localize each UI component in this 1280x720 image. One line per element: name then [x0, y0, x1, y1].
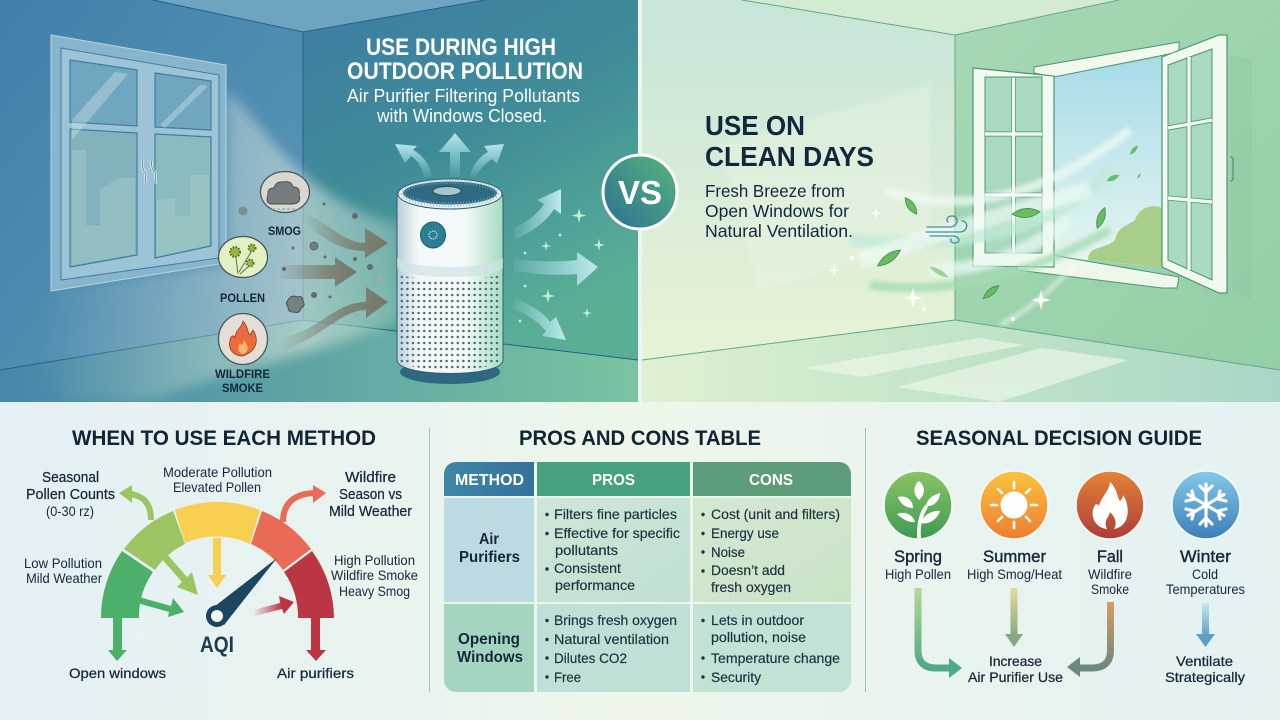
label: high pollution: Wildfire Smoke — [331, 567, 418, 583]
table header — [444, 462, 851, 496]
subheading: clean days: Fresh Breeze from — [705, 181, 845, 201]
icon: wildfire — [218, 314, 268, 364]
season labels: Winter — [1180, 547, 1231, 566]
heading: seasonal guide: SEASONAL DECISION GUIDE — [916, 427, 1202, 450]
gauge needle — [206, 558, 277, 627]
arrow: low pollution to gauge — [137, 597, 184, 617]
wall light beam — [720, 85, 930, 290]
icon: spring — [884, 471, 952, 539]
sparkles — [519, 208, 605, 322]
season labels: Cold — [1192, 566, 1218, 582]
arrow: wildfire season — [283, 485, 326, 522]
section: pros and cons — [444, 427, 851, 692]
table — [444, 462, 851, 692]
subheading: high pollution: with Windows Closed. — [376, 106, 547, 126]
label: wildfire smoke: SMOKE — [222, 381, 263, 395]
floor light patches — [803, 338, 1128, 402]
season labels: Temperatures — [1166, 581, 1245, 597]
row: air purifiers: Purifiers — [459, 549, 520, 566]
label: wildfire smoke: WILDFIRE — [215, 367, 270, 381]
arrows: clean air out — [514, 189, 598, 340]
arrow: winter — [1196, 603, 1215, 647]
season labels: Spring — [894, 547, 942, 566]
arrow: pollen to purifier — [280, 257, 357, 287]
gauge: AQI — [101, 502, 334, 618]
section: when to use each method — [24, 427, 418, 681]
badge: VS: VS — [618, 174, 662, 211]
heading: pros and cons: PROS AND CONS TABLE — [519, 427, 761, 450]
row: opening windows: pollution, noise — [711, 629, 806, 645]
purifier control button — [420, 222, 446, 248]
row: opening windows: Opening — [458, 631, 520, 648]
subheading: clean days — [705, 181, 853, 241]
outcome: ventilate strategically: Ventilate — [1176, 653, 1233, 669]
heading: high pollution — [347, 34, 583, 85]
arrow: fall — [1067, 602, 1110, 677]
outcome: ventilate strategically: Strategically — [1165, 669, 1245, 685]
heading: clean days: CLEAN DAYS — [705, 141, 874, 172]
row: air purifiers: Cost (unit and filters) — [711, 506, 840, 522]
panel: clean days room — [642, 0, 1280, 402]
label: low pollution — [24, 555, 102, 586]
row: air purifiers: Effective for specific — [554, 525, 680, 541]
label: high pollution: High Pollution — [334, 552, 415, 568]
icon: wind — [926, 216, 967, 243]
label: pollen: POLLEN — [220, 291, 265, 305]
outcome: ventilate strategically — [1165, 653, 1245, 685]
row: air purifiers: pollutants — [555, 542, 618, 558]
label: moderate: Moderate Pollution — [163, 464, 272, 480]
season labels — [885, 547, 1245, 597]
arrow: moderate to gauge — [208, 538, 226, 588]
icon: summer — [980, 471, 1048, 539]
row: air purifiers: Air — [479, 531, 499, 548]
row: air purifiers: fresh oxygen — [711, 579, 791, 595]
pollutant particles — [238, 202, 383, 312]
label: open windows: Open windows — [69, 665, 166, 681]
heading: clean days — [705, 110, 874, 172]
panel divider — [638, 0, 642, 402]
row: opening windows: Free — [554, 669, 581, 685]
label: moderate: Elevated Pollen — [173, 479, 261, 495]
arrows: clean air up — [395, 133, 504, 177]
row: air purifiers: Doesn’t add — [711, 562, 785, 578]
label: wildfire season — [329, 469, 412, 520]
row: air purifiers: Noise — [711, 544, 745, 560]
label: high pollution — [331, 552, 418, 599]
label: seasonal pollen — [26, 469, 115, 519]
arrow: gauge to high — [253, 596, 294, 616]
outcome: increase purifier use — [968, 653, 1063, 685]
season labels: Wildfire — [1088, 566, 1132, 582]
icon: winter — [1172, 471, 1240, 539]
icon: leaves — [875, 144, 1141, 301]
row: air purifiers: Filters fine particles — [554, 506, 677, 522]
season labels: Smoke — [1091, 581, 1129, 597]
row: air purifiers: performance — [555, 577, 635, 593]
arrow: seasonal pollen to gauge — [161, 553, 198, 595]
table header: CONS — [749, 472, 793, 489]
heading: high pollution: USE DURING HIGH — [366, 34, 556, 61]
right sash — [1162, 35, 1233, 293]
label: low pollution: Mild Weather — [26, 570, 102, 586]
label: smog: SMOG — [268, 224, 301, 238]
icon: smog — [260, 172, 310, 212]
table header: METHOD — [455, 472, 524, 489]
label: wildfire season: Mild Weather — [329, 503, 412, 520]
icon: closed window — [51, 35, 226, 291]
label: wildfire season: Season vs — [339, 486, 402, 503]
subheading: high pollution: Air Purifier Filtering Pollutants — [347, 86, 580, 106]
arrow: spring — [918, 588, 962, 678]
arrow: seasonal pollen — [119, 485, 151, 520]
arrow: air purifiers — [306, 618, 326, 661]
haze beam — [40, 90, 400, 400]
row: opening windows: Lets in outdoor — [711, 612, 804, 628]
label: air purifiers: Air purifiers — [277, 665, 354, 681]
row: opening windows: Dilutes CO2 — [554, 650, 627, 666]
section: seasonal guide — [884, 427, 1245, 685]
label: AQI: AQI — [200, 632, 234, 657]
arrow: smog to purifier — [306, 213, 388, 258]
left sash — [973, 68, 1054, 267]
row: air purifiers — [444, 498, 851, 602]
arrow: summer — [1005, 588, 1023, 647]
label: wildfire smoke — [215, 367, 270, 395]
badge: VS — [603, 155, 677, 229]
label: wildfire season: Wildfire — [345, 469, 396, 486]
sparkles — [828, 207, 1051, 321]
row: opening windows: Brings fresh oxygen — [554, 612, 677, 628]
icon: pollen — [218, 236, 268, 278]
heading: when to use: WHEN TO USE EACH METHOD — [72, 427, 376, 450]
subheading: clean days: Natural Ventilation. — [705, 221, 853, 241]
season labels: High Smog/Heat — [967, 566, 1062, 582]
row: opening windows: Security — [711, 669, 761, 685]
label: high pollution: Heavy Smog — [339, 583, 410, 599]
row: opening windows: Temperature change — [711, 650, 840, 666]
subheading: clean days: Open Windows for — [705, 201, 849, 221]
row: opening windows: Windows — [457, 649, 523, 666]
season labels: Fall — [1097, 547, 1123, 566]
arrow: open windows — [108, 618, 127, 661]
row: opening windows: Natural ventilation — [554, 631, 669, 647]
icon: open window — [973, 35, 1252, 300]
label: moderate — [163, 464, 272, 495]
outcome: increase purifier use: Air Purifier Use — [968, 669, 1063, 685]
row: air purifiers: Energy use — [711, 525, 779, 541]
row: opening windows — [444, 604, 851, 692]
lower background — [0, 402, 1280, 720]
outcome: increase purifier use: Increase — [989, 653, 1042, 669]
arrow: smoke to purifier — [282, 287, 388, 350]
icon: air purifier — [397, 179, 503, 384]
season labels: High Pollen — [885, 566, 951, 582]
table header: PROS — [592, 472, 635, 489]
label: seasonal pollen: Pollen Counts — [26, 486, 115, 503]
label: seasonal pollen: (0-30 rz) — [46, 503, 94, 519]
breeze swoosh — [850, 130, 1130, 325]
label: seasonal pollen: Seasonal — [42, 469, 99, 486]
heading: clean days: USE ON — [705, 110, 805, 141]
label: low pollution: Low Pollution — [24, 555, 102, 571]
season labels: Summer — [983, 547, 1046, 566]
icon: fall — [1076, 471, 1144, 539]
panel: high pollution room — [0, 0, 638, 402]
row: air purifiers: Consistent — [554, 560, 621, 576]
subheading: high pollution — [347, 86, 580, 126]
heading: high pollution: OUTDOOR POLLUTION — [347, 58, 583, 85]
